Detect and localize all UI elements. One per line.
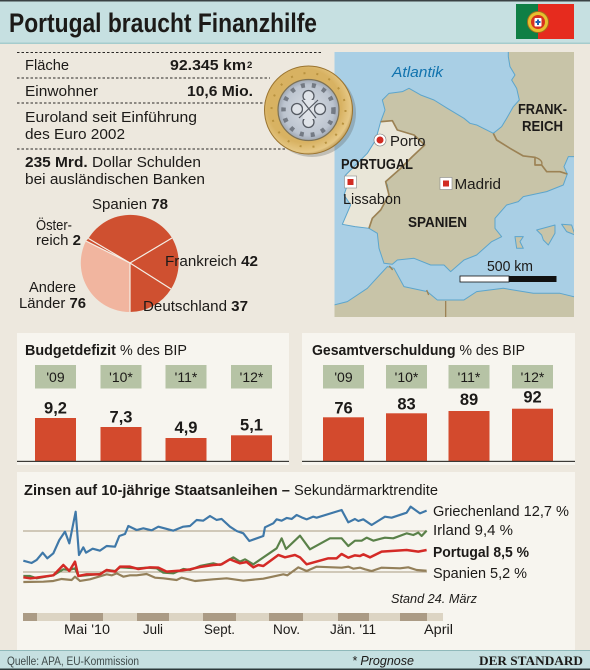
map: Balearic islands — [515, 224, 575, 248]
fact: Einwohner — [25, 83, 253, 100]
year labels: '11* — [458, 369, 481, 385]
panel: bond yields line chart — [17, 472, 575, 650]
bars — [323, 409, 553, 461]
fact: Schulden: bei ausländischen Banken — [25, 171, 205, 188]
map: Portugal — [342, 121, 425, 228]
pie label: Deutschland: Deutschland 37 — [143, 298, 248, 315]
fact: Fläche: Fläche — [25, 57, 69, 74]
heading: Zinsen: Zinsen auf 10-jährige Staatsanleihen – Sekundärmarktrendite — [24, 482, 438, 499]
pie label: Österreich: Öster- — [36, 216, 72, 234]
month axis labels: Mai '10 — [64, 621, 110, 637]
label: Frankreich: FRANK- — [518, 101, 567, 118]
year labels — [35, 365, 272, 388]
bar values: 83 — [397, 395, 416, 413]
year labels: '09 — [334, 369, 353, 385]
month axis labels: Sept. — [204, 621, 235, 637]
fact: Einwohner: 10,6 Mio. — [187, 83, 253, 100]
month axis labels: Jän. '11 — [330, 621, 376, 637]
marker: Madrid: Madrid — [454, 176, 501, 193]
pie label: Andere Länder — [19, 279, 86, 312]
line: Irland — [23, 531, 427, 578]
pie label: Andere Länder: Andere — [29, 279, 76, 296]
fact: Euroland: Euroland seit Einführung — [25, 109, 197, 126]
legend: Irland: Irland 9,4 % — [433, 522, 513, 539]
panel: Budgetdefizit — [17, 333, 289, 465]
fact: Euroland — [25, 109, 197, 143]
bar values — [44, 399, 263, 437]
pie label: Österreich — [36, 216, 81, 249]
marker: Porto — [374, 133, 426, 150]
icon: Portuguese flag — [516, 4, 574, 39]
logo: Der Standard: DER STANDARD — [479, 654, 583, 668]
title: Portugal braucht Finanzhilfe — [9, 8, 317, 38]
pie label: Österreich: reich 2 — [36, 232, 81, 249]
map: France — [493, 52, 574, 174]
label: Portugal: PORTUGAL — [341, 156, 413, 173]
heading: Gesamtverschuldung: Gesamtverschuldung % des BIP — [312, 342, 525, 359]
marker: Lissabon: Lissabon — [343, 191, 401, 208]
year labels — [323, 365, 553, 388]
date note: Stand 24. März — [391, 591, 477, 606]
legend: Griechenland: Griechenland 12,7 % — [433, 503, 569, 520]
fact list — [17, 52, 323, 188]
fact: Schulden — [25, 154, 205, 188]
bar values: 4,9 — [175, 419, 197, 437]
month axis labels: Juli — [143, 621, 163, 637]
icon: euro coin — [264, 66, 356, 157]
map: Spain — [369, 88, 567, 272]
scale bar — [460, 258, 556, 282]
year labels: '10* — [109, 369, 133, 385]
month axis labels — [64, 621, 453, 637]
marker: Porto: Porto — [390, 133, 426, 150]
legend: Spanien: Spanien 5,2 % — [433, 565, 527, 582]
month axis labels: Nov. — [273, 621, 300, 637]
fact: Fläche: 2 — [247, 60, 252, 71]
bar values: 9,2 — [44, 399, 67, 417]
label: Atlantik: Atlantik — [391, 64, 445, 81]
pie label: Spanien: Spanien 78 — [92, 196, 168, 213]
legend: Portugal: Portugal 8,5 % — [433, 544, 529, 561]
year labels: '11* — [175, 369, 198, 385]
bar values: 92 — [523, 389, 542, 407]
bar values — [334, 389, 542, 417]
line: Griechenland — [23, 507, 427, 563]
year labels: '12* — [240, 369, 264, 385]
panel: Gesamtverschuldung — [302, 333, 575, 465]
pie label: Andere Länder: Länder 76 — [19, 295, 86, 312]
line chart series — [23, 507, 427, 582]
label: Frankreich: REICH — [522, 118, 563, 135]
year labels: '10* — [395, 369, 419, 385]
line: Spanien — [23, 567, 427, 582]
bars — [35, 418, 272, 461]
pie chart: debts by country — [19, 196, 258, 315]
month axis labels: April — [424, 621, 453, 637]
fact: Fläche — [25, 57, 252, 74]
fact: Fläche: 92.345 km — [170, 57, 246, 74]
fact: Einwohner: Einwohner — [25, 83, 98, 100]
line: Portugal — [23, 550, 427, 578]
label: Frankreich — [518, 101, 567, 135]
scale bar: 500 km — [487, 258, 533, 275]
footnote: * Prognose — [352, 653, 414, 668]
footer band — [0, 650, 590, 670]
bar values: 76 — [334, 399, 353, 417]
year labels: '09 — [46, 369, 65, 385]
map — [334, 52, 574, 317]
fact: Schulden: 235 Mrd. Dollar Schulden — [25, 154, 201, 171]
source: Quelle: APA, EU-Kommission — [7, 656, 139, 668]
heading: Budgetdefizit: Budgetdefizit % des BIP — [25, 342, 187, 359]
timeline band — [23, 613, 443, 621]
marker: Lissabon — [343, 176, 401, 208]
pie label: Frankreich: Frankreich 42 — [165, 253, 258, 270]
year labels: '12* — [521, 369, 545, 385]
map: North Africa — [334, 266, 574, 317]
bar values: 89 — [460, 391, 478, 409]
bar values: 5,1 — [240, 417, 263, 435]
header band — [0, 0, 590, 44]
fact: Euroland: des Euro 2002 — [25, 126, 125, 143]
bar values: 7,3 — [110, 408, 132, 426]
label: Spanien: SPANIEN — [408, 214, 467, 231]
